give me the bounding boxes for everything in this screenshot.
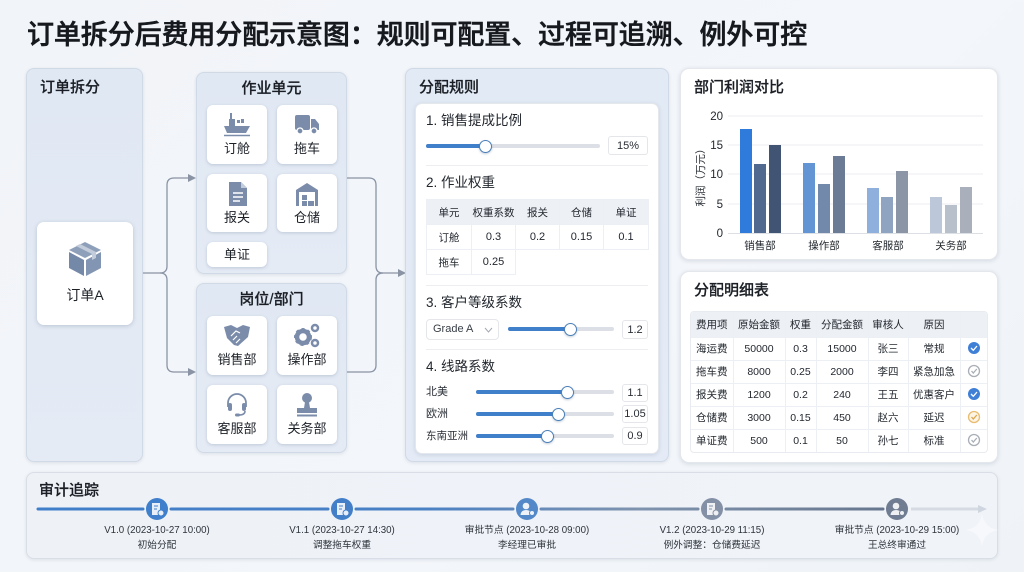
table: allocation details: 审核人 xyxy=(872,319,904,331)
table: work weights: 仓储 xyxy=(571,206,592,218)
label: Southeast Asia: 东南亚洲 xyxy=(426,430,468,442)
table: work weights: 单元 xyxy=(438,206,460,218)
panel: rules inner card xyxy=(415,103,659,454)
table: allocation details: 原因 xyxy=(924,319,944,331)
icon: stamp xyxy=(297,393,317,416)
bar chart: 销售部 xyxy=(744,239,776,252)
table: allocation details: 0.2 xyxy=(793,388,808,400)
table: allocation details: 标准 xyxy=(924,435,944,447)
event text: approval 1: 李经理已审批 xyxy=(498,540,556,551)
table: allocation details: 0.15 xyxy=(790,412,811,424)
event text: v1.1: 调整拖车权重 xyxy=(313,540,371,551)
bar chart: 利润（万元） xyxy=(694,144,707,206)
table: work weights xyxy=(426,199,649,275)
node: v1.0 xyxy=(146,498,168,520)
value: 15% xyxy=(608,136,648,155)
bar chart: 5 xyxy=(717,199,723,211)
event text: v1.0: V1.0 (2023-10-27 10:00) xyxy=(104,525,210,536)
table: allocation details: 赵六 xyxy=(878,412,898,424)
event text: approval 2: 审批节点 (2023-10-29 15:00) xyxy=(835,525,959,536)
card: documents: 单证 xyxy=(224,247,250,262)
table: work weights: 订舱 xyxy=(438,232,460,244)
table: allocation details: 50000 xyxy=(744,342,774,354)
value: 0.9 xyxy=(622,427,648,445)
table: allocation details: 李四 xyxy=(878,366,898,378)
node: v1.1 xyxy=(331,498,353,520)
bar chart: 10 xyxy=(710,169,723,181)
icon: document xyxy=(229,182,247,206)
icon: gears xyxy=(294,324,320,348)
event text: approval 1 xyxy=(465,524,589,551)
event text: v1.2: 例外调整：仓储费延迟 xyxy=(664,540,760,551)
card: customer service: 客服部 xyxy=(217,421,256,436)
table: allocation details: 优惠客户 xyxy=(913,389,955,401)
panel: allocation details xyxy=(680,271,998,463)
table: work weights: 拖车 xyxy=(438,256,460,268)
rule 4 label: 4. 线路系数 xyxy=(426,359,495,374)
table: work weights: 0.3 xyxy=(486,231,501,243)
table: allocation details: 分配金额 xyxy=(821,319,863,331)
table: allocation details xyxy=(690,311,988,453)
table: work weights: 单证 xyxy=(616,206,636,218)
table: work weights: 0.25 xyxy=(483,256,504,268)
event text: approval 2 xyxy=(835,524,959,551)
rule 1 label: 1. 销售提成比例 xyxy=(426,113,522,128)
card: warehousing: 仓储 xyxy=(294,210,320,225)
icon: sparkle xyxy=(997,530,998,531)
event text: v1.2 xyxy=(660,525,764,551)
card: warehousing xyxy=(277,174,337,232)
table: allocation details: 15000 xyxy=(827,342,857,354)
heading: departments: 岗位/部门 xyxy=(239,291,304,308)
table: allocation details: 原始金额 xyxy=(738,319,780,331)
table: allocation details: 常规 xyxy=(924,343,944,355)
table: allocation details: 紧急加急 xyxy=(913,366,955,378)
rule 2 label: 2. 作业权重 xyxy=(426,175,495,190)
rule 3 label: 3. 客户等级系数 xyxy=(426,295,522,310)
table: allocation details: 0.1 xyxy=(793,435,808,447)
card: customs xyxy=(207,174,267,232)
value: 0.9: 0.9 xyxy=(627,430,643,442)
value: 1.05: 1.05 xyxy=(624,408,646,420)
slider: Southeast Asia xyxy=(476,434,614,438)
event text: approval 1: 审批节点 (2023-10-28 09:00) xyxy=(465,525,589,536)
table: allocation details: 0.3 xyxy=(793,342,808,354)
table: allocation details: 50 xyxy=(836,435,848,447)
table: allocation details: 0.25 xyxy=(790,366,811,378)
heading: profit comparison: 部门利润对比 xyxy=(694,79,784,96)
heading: work units: 作业单元 xyxy=(241,80,302,97)
table: allocation details: 张三 xyxy=(878,343,898,355)
select: grade: Grade A xyxy=(433,323,473,335)
label: order A: 订单A xyxy=(66,287,104,303)
card: customs affairs: 关务部 xyxy=(287,421,326,436)
table: allocation details: 1200 xyxy=(747,388,771,400)
table: allocation details: 500 xyxy=(750,435,768,447)
event text: v1.1: V1.1 (2023-10-27 14:30) xyxy=(289,525,395,536)
slider: grade xyxy=(508,327,614,331)
card: trucking xyxy=(277,105,337,164)
table: allocation details: 2000 xyxy=(830,366,854,378)
table: allocation details: 报关费 xyxy=(696,389,728,401)
bar chart xyxy=(694,111,983,252)
bar chart: 15 xyxy=(710,140,723,152)
event text: v1.1 xyxy=(289,525,395,551)
table: allocation details: 拖车费 xyxy=(696,366,728,378)
panel: audit trail xyxy=(26,472,998,559)
bar chart: 0 xyxy=(717,228,723,240)
card: customer service xyxy=(207,385,267,444)
event text: v1.2: V1.2 (2023-10-29 11:15) xyxy=(660,525,764,536)
icon: package xyxy=(69,242,101,276)
icon: ship xyxy=(224,113,250,136)
card: sales: 销售部 xyxy=(217,352,256,367)
label: Europe: 欧洲 xyxy=(426,408,448,420)
node: approval 2 xyxy=(886,498,908,520)
event text: approval 2: 王总终审通过 xyxy=(868,540,926,551)
card: trucking: 拖车 xyxy=(294,141,320,156)
icon: handshake xyxy=(224,325,250,346)
node: v1.2 xyxy=(701,498,723,520)
table: allocation details: 王五 xyxy=(878,389,898,401)
arrows: connectors xyxy=(143,174,405,376)
table: allocation details: 450 xyxy=(833,412,851,424)
bar chart: 20 xyxy=(710,111,723,123)
value: 1.05 xyxy=(622,405,648,423)
panel: profit chart xyxy=(680,68,998,260)
panel: departments xyxy=(196,283,347,453)
table: allocation details: 仓储费 xyxy=(696,412,728,424)
card: customs affairs xyxy=(277,385,337,444)
value: 1.2 xyxy=(622,320,648,339)
status icons xyxy=(968,342,980,446)
timeline line xyxy=(36,505,986,513)
icon: chevron xyxy=(484,328,492,333)
table: work weights: 0.15 xyxy=(571,231,592,243)
select: grade xyxy=(426,319,499,340)
card: operations xyxy=(277,316,337,375)
table: allocation details: 权重 xyxy=(790,319,811,331)
panel: work units xyxy=(196,72,347,274)
card: booking: 订舱 xyxy=(224,141,250,156)
slider: Europe xyxy=(476,412,614,416)
node: approval 1 xyxy=(516,498,538,520)
bar chart: 客服部 xyxy=(872,239,904,252)
heading: audit trail: 审计追踪 xyxy=(39,482,99,499)
slider: North America xyxy=(476,390,614,394)
bar chart: 操作部 xyxy=(808,239,840,252)
value: 15%: 15% xyxy=(617,140,639,152)
icon: headset xyxy=(227,393,247,416)
value: 1.1 xyxy=(622,384,648,402)
heading: allocation rules: 分配规则 xyxy=(419,79,479,96)
table: allocation details: 8000 xyxy=(747,366,771,378)
table: allocation details: 费用项 xyxy=(696,319,728,331)
value: 1.2: 1.2 xyxy=(627,324,643,336)
table: allocation details: 延迟 xyxy=(924,412,944,424)
card: operations: 操作部 xyxy=(287,352,326,367)
table: allocation details: 单证费 xyxy=(696,435,728,447)
icon: warehouse xyxy=(296,183,318,206)
value: 1.1: 1.1 xyxy=(627,387,643,399)
table: allocation details: 孙七 xyxy=(878,435,898,447)
card: order A xyxy=(37,222,133,325)
panel: order split xyxy=(26,68,143,462)
event text: v1.0 xyxy=(104,525,210,551)
table: work weights: 0.2 xyxy=(530,231,545,243)
heading: order split: 订单拆分 xyxy=(40,79,100,96)
card: documents xyxy=(207,242,267,267)
icon: truck xyxy=(295,115,319,134)
event text: v1.0: 初始分配 xyxy=(138,540,176,551)
card: booking xyxy=(207,105,267,164)
slider: commission xyxy=(426,144,600,148)
table: work weights: 权重系数 xyxy=(472,206,514,218)
table: work weights: 0.1 xyxy=(618,231,634,243)
panel: allocation rules xyxy=(405,68,669,462)
label: North America: 北美 xyxy=(426,386,448,398)
card: customs: 报关 xyxy=(224,210,250,225)
heading: allocation details: 分配明细表 xyxy=(694,282,769,299)
table: allocation details: 240 xyxy=(833,388,851,400)
table: allocation details: 3000 xyxy=(747,412,771,424)
table: allocation details: 海运费 xyxy=(696,343,728,355)
title: 订单拆分后费用分配示意图：规则可配置、过程可追溯、例外可控 xyxy=(27,20,807,50)
table: work weights: 报关 xyxy=(527,206,548,218)
card: sales xyxy=(207,316,267,375)
bar chart: 关务部 xyxy=(935,239,967,252)
